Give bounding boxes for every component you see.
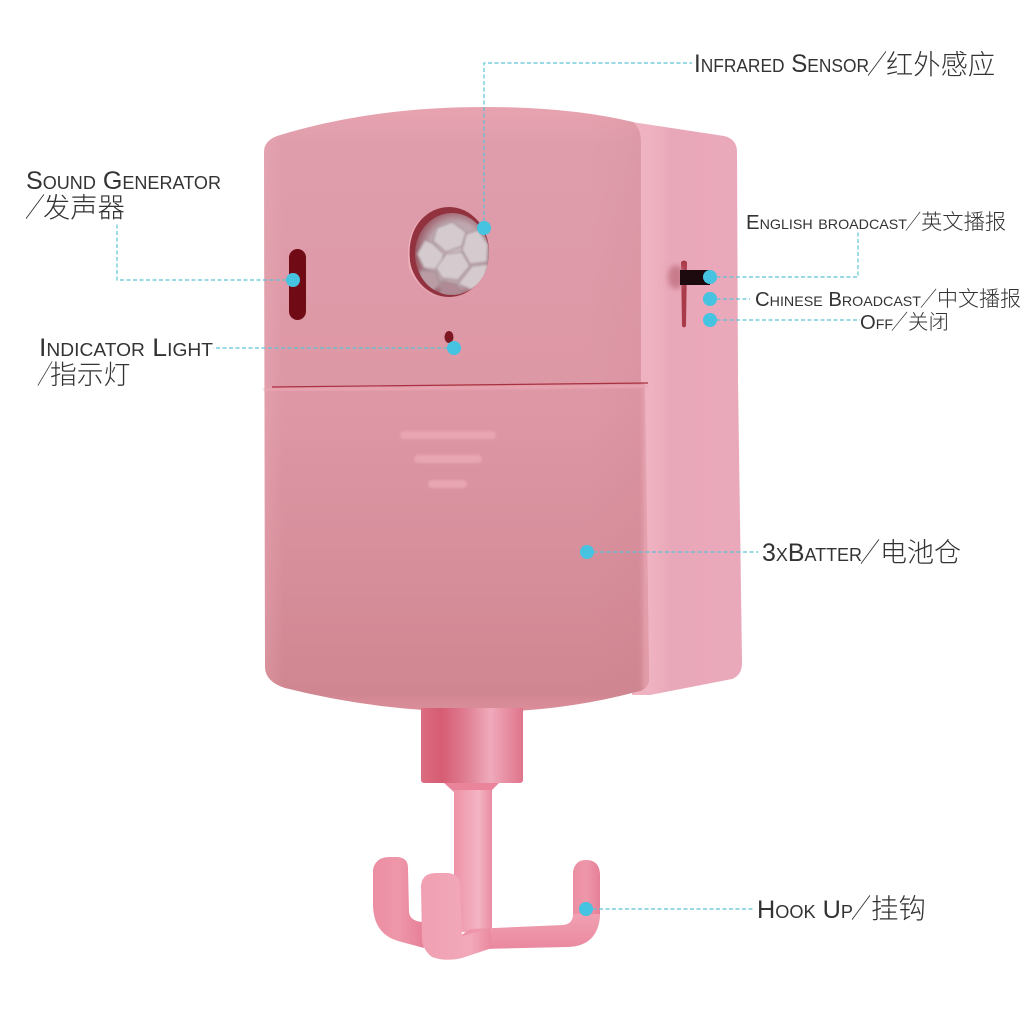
label: infrared sensor: ／ xyxy=(867,43,887,82)
label: infrared sensor: 红外感应 xyxy=(886,49,995,80)
label: sound generator: ／ xyxy=(25,186,45,225)
front face edge shading xyxy=(264,107,649,712)
seam highlight xyxy=(264,386,648,390)
infrared sensor lens xyxy=(408,207,489,297)
right prong and bar xyxy=(440,860,600,958)
right prong upper xyxy=(573,860,600,914)
label: off: ／ xyxy=(891,306,908,336)
sound generator slot xyxy=(289,249,306,320)
label: hook up xyxy=(579,887,926,926)
switch shadow xyxy=(668,265,684,289)
label: battery: 3xBatter xyxy=(762,539,862,567)
mode switch slot xyxy=(681,260,687,328)
seam between covers xyxy=(272,383,648,387)
hook collar xyxy=(421,708,523,783)
mode switch knob xyxy=(680,270,710,285)
indicator light hole xyxy=(444,331,454,343)
label: chinese broadcast: ／ xyxy=(920,283,937,313)
left rear prong xyxy=(373,857,424,948)
hook stem xyxy=(454,790,492,932)
label: english broadcast: 英文播报 xyxy=(921,210,1006,234)
label: off xyxy=(703,306,949,336)
label: english broadcast: ／ xyxy=(905,206,921,236)
panel: side face xyxy=(632,122,742,695)
label: chinese broadcast xyxy=(703,283,1021,313)
label: battery xyxy=(580,531,961,570)
hook prongs xyxy=(373,857,600,960)
label: sound generator xyxy=(25,167,300,287)
label: hook up: 挂钩 xyxy=(871,893,926,924)
label: indicator light: 指示灯 xyxy=(50,360,130,390)
label: off: Off xyxy=(860,312,893,334)
label: sound generator: 发声器 xyxy=(43,192,125,223)
battery cover grip ridges xyxy=(400,431,496,488)
label: indicator light xyxy=(37,334,461,392)
label: indicator light: ／ xyxy=(37,353,53,392)
hook neck xyxy=(444,783,499,792)
front prong xyxy=(421,873,492,960)
panel: front face xyxy=(264,107,649,712)
label: english broadcast: English broadcast xyxy=(746,212,907,234)
label: sound generator: Sound Generator xyxy=(26,167,221,195)
label: infrared sensor xyxy=(477,43,995,235)
label: hook up: Hook Up xyxy=(757,896,853,924)
label: battery: 电池仓 xyxy=(880,538,961,568)
label: off: 关闭 xyxy=(908,311,949,334)
label: infrared sensor: Infrared Sensor xyxy=(694,50,869,78)
label: chinese broadcast: 中文播报 xyxy=(937,288,1021,311)
label: hook up: ／ xyxy=(851,887,871,926)
label: battery: ／ xyxy=(860,531,880,570)
label: indicator light: Indicator Light xyxy=(39,334,213,362)
device body xyxy=(264,107,742,960)
label: english broadcast xyxy=(703,206,1006,284)
label: chinese broadcast: Chinese Broadcast xyxy=(755,289,921,311)
